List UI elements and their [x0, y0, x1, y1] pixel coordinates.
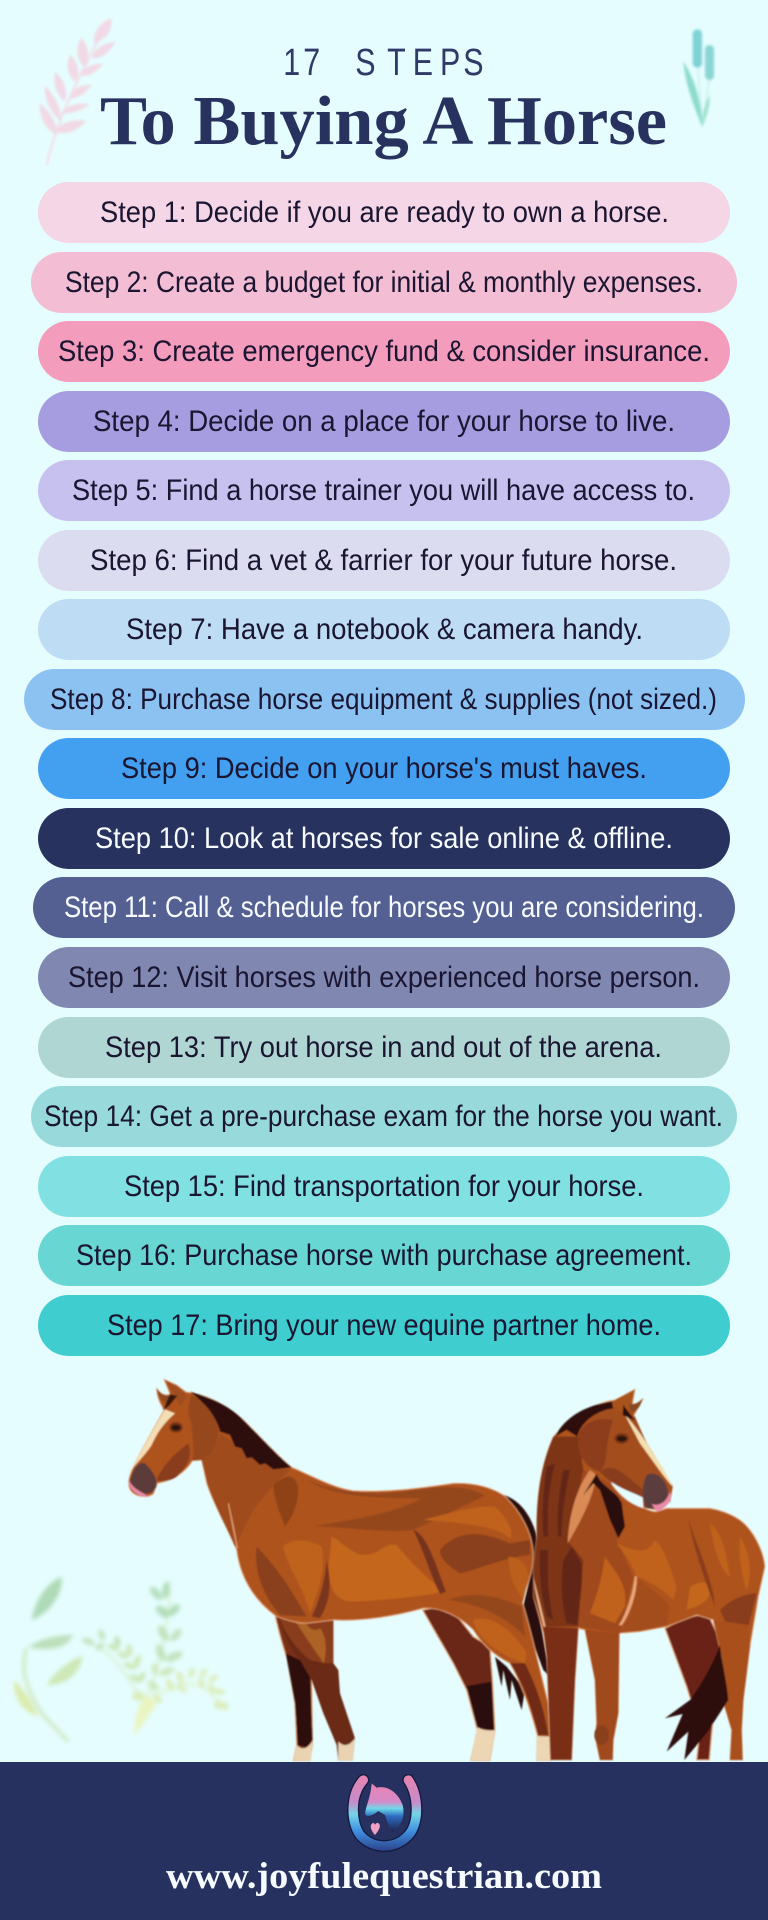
step 12 — [38, 947, 730, 1008]
right horse jaw gap — [611, 1482, 644, 1508]
step 6 — [38, 530, 730, 591]
left horse body silhouette — [129, 1379, 552, 1761]
step 9: Step 9: Decide on your horse's must haves. — [121, 752, 647, 785]
step 10: Step 10: Look at horses for sale online & offline. — [95, 822, 673, 855]
step 12: Step 12: Visit horses with experienced horse person. — [68, 961, 700, 994]
right horse front legs — [543, 1627, 619, 1760]
step 7 — [38, 599, 730, 660]
footer website url: www.joyfulequestrian.com — [166, 1856, 602, 1897]
step 1: Step 1: Decide if you are ready to own a horse. — [100, 196, 669, 229]
left horse far foreleg — [275, 1615, 320, 1761]
right horse body silhouette — [533, 1389, 765, 1760]
step 1 — [38, 182, 730, 243]
horse head silhouette — [365, 1783, 404, 1832]
step 3: Step 3: Create emergency fund & consider insurance. — [58, 335, 710, 368]
step 5: Step 5: Find a horse trainer you will have access to. — [72, 474, 695, 507]
step 3 — [38, 321, 730, 382]
step 17: Step 17: Bring your new equine partner home. — [107, 1309, 661, 1342]
right horse tail — [665, 1645, 728, 1760]
step 9 — [38, 738, 730, 799]
step 8 — [24, 669, 745, 730]
step 13: Step 13: Try out horse in and out of the arena. — [105, 1031, 662, 1064]
step 16 — [38, 1225, 730, 1286]
step 2: Step 2: Create a budget for initial & monthly expenses. — [65, 266, 703, 299]
left horse head — [129, 1379, 218, 1497]
step 15: Step 15: Find transportation for your horse. — [124, 1170, 644, 1203]
left horse rump tail — [500, 1494, 550, 1677]
step 7: Step 7: Have a notebook & camera handy. — [126, 613, 643, 646]
horseshoe — [353, 1780, 416, 1846]
left horse far hind leg — [423, 1605, 495, 1761]
step 14 — [31, 1086, 737, 1147]
right horse shading patches — [617, 1520, 757, 1760]
decoration: leaf sprigs — [14, 1577, 229, 1742]
logo: horseshoe with horse head — [353, 1780, 416, 1846]
step 5 — [38, 460, 730, 521]
step 4 — [38, 391, 730, 452]
step 17 — [38, 1295, 730, 1356]
right horse far hind leg — [665, 1615, 722, 1760]
right horse head — [555, 1389, 673, 1512]
step 11 — [33, 877, 735, 938]
right horse neck and chest — [533, 1437, 633, 1643]
illustration: right horse — [533, 1389, 765, 1760]
step 10 — [38, 808, 730, 869]
decoration: pink wheat sprig — [41, 20, 113, 165]
steps list — [24, 182, 745, 1356]
step 6: Step 6: Find a vet & farrier for your future horse. — [90, 544, 677, 577]
decoration: teal cattail — [683, 29, 714, 127]
footer band — [0, 1762, 768, 1920]
left horse near foreleg — [280, 1618, 355, 1761]
left horse tail strands — [495, 1657, 525, 1710]
heading: 17 steps: 17 STEPS — [283, 42, 483, 84]
left horse shading patches — [202, 1433, 552, 1761]
heart — [371, 1823, 380, 1835]
step 2 — [31, 252, 737, 313]
step 4: Step 4: Decide on a place for your horse to live. — [93, 405, 675, 438]
illustration: left horse — [129, 1379, 552, 1761]
step 16: Step 16: Purchase horse with purchase agreement. — [76, 1239, 692, 1272]
right horse mane lock — [583, 1473, 625, 1538]
step 13 — [38, 1017, 730, 1078]
heading: to buying a horse: To Buying A Horse — [100, 83, 667, 160]
step 15 — [38, 1156, 730, 1217]
left horse mane — [190, 1392, 292, 1469]
